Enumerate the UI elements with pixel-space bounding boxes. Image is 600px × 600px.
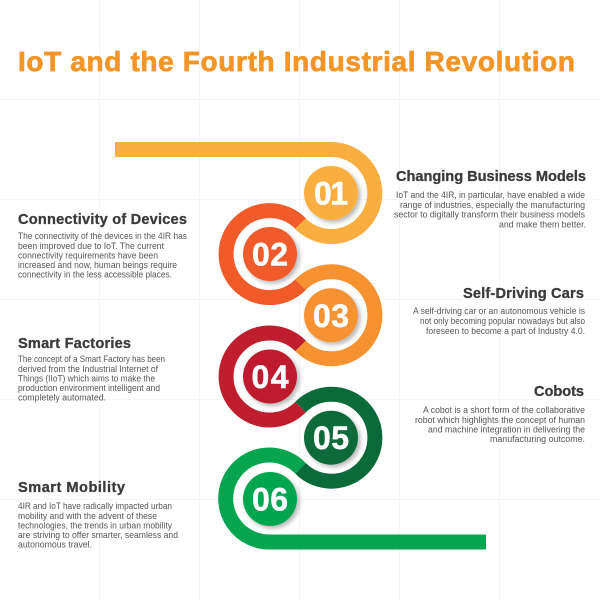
body text: robot which highlights the concept of human [415,415,585,425]
step 01: ring and number: 01 [314,176,348,212]
body text: and machine integration in delivering the [428,424,585,434]
step 06: ring and number: 06 [252,482,288,518]
title: IoT and the Fourth Industrial Revolution [18,46,575,77]
body text: increased and now, human beings require [18,260,177,270]
body text: foreseen to become a part of Industry 4.0. [426,326,585,336]
heading: Self-Driving Cars [463,286,584,302]
panel: smart mobility [18,480,178,550]
step 06: ring and number [226,455,486,542]
step 03: ring and number: 03 [313,298,349,334]
heading: Cobots [534,384,584,400]
body text: technologies, the trends in urban mobility [18,520,172,530]
body text: and make them better. [499,220,586,230]
panel: smart factories [18,336,165,402]
body text: 4IR and IoT have radically impacted urban [18,501,172,511]
body text: A cobot is a short form of the collaborative [423,405,585,415]
serpentine timeline [115,149,486,542]
body text: derived from the Industrial Internet of [18,364,158,374]
body text [18,501,178,550]
body text: autonomous travel. [18,540,92,550]
body text: are striving to offer smarter, seamless and [18,530,178,540]
body text: The connectivity of the devices in the 4IR has [18,231,187,241]
body text: production environment intelligent and [18,383,160,393]
body text: range of industries, especially the manufacturing [400,200,585,210]
step 05: ring and number: 05 [313,420,349,456]
step 04: ring and number: 04 [252,359,289,395]
body text [18,231,187,280]
panel: self-driving cars [413,286,585,336]
body text: been improved due to IoT. The current [18,241,164,251]
panel: cobots [415,384,585,444]
body text: sector to digitally transform their business models [394,210,585,220]
body text: The concept of a Smart Factory has been [18,354,165,364]
step 02: ring and number [226,211,300,298]
body text: connectivity requirements have been [18,250,158,260]
body text: IoT and the 4IR, in particular, have enabled a wide [396,190,585,200]
body text: not only becoming popular nowadays but also [420,316,585,326]
step 05: ring and number [300,394,375,481]
body text [18,354,165,402]
body text: Things (IIoT) which aims to make the [18,374,155,384]
panel: changing business models [394,169,586,230]
step 01: ring and number [115,149,375,236]
heading: Changing Business Models [396,169,586,185]
body text: A self-driving car or an autonomous vehicle is [413,306,585,316]
heading: Smart Factories [18,336,131,352]
body text [415,405,585,444]
body text: manufacturing outcome. [490,434,585,444]
body text: completely automated. [18,392,106,402]
step 02: ring and number: 02 [252,236,288,272]
heading: Smart Mobility [18,480,126,496]
body text: connectivity in the less accessible places. [18,270,172,280]
step 04: ring and number [226,333,300,420]
step 03: ring and number [300,272,375,359]
body text [394,190,586,230]
body text [413,306,585,336]
heading: Connectivity of Devices [18,212,187,228]
body text: mobility and with the advent of these [18,511,157,521]
panel: connectivity of devices [18,212,187,280]
